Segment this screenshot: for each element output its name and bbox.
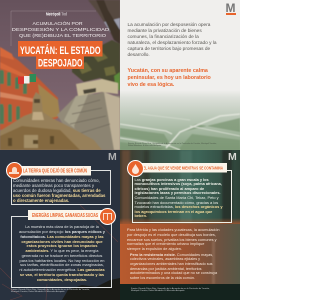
- icon: Mexican flag: [18, 74, 36, 84]
- text: tierra: acuerdos de dudosa legalidad, sus tierras de: [13, 188, 101, 193]
- text: agua: Tzucacab han documentado cómo, gracias a los: [134, 200, 218, 205]
- text: energías: organizaciones civiles han denunciado que: [21, 239, 103, 244]
- text: tierra: [13, 178, 106, 203]
- panel: cover with Yucatán landmarks: [0, 0, 120, 150]
- orange highlight text: peninsular, es hoy un laboratorio: [128, 74, 211, 80]
- text: agua: beben.: [134, 213, 147, 218]
- cover subtitle: QUE (RE)DIBUJA EL TERRITORIO: [19, 33, 107, 38]
- wind turbine background: [0, 205, 120, 300]
- source note: Fuente: Ricardo Pérez Ruiz, Geografía de la Acumulación en la Península de Yucatán,: [131, 288, 210, 290]
- text: Mérida: encarece sus suelos, privatiza los bienes comunes y: [127, 238, 217, 242]
- pyramid: [57, 94, 120, 150]
- text: energías: fotovoltaicos. Las comunidades mayas y las: [20, 234, 104, 239]
- text: Mérida: normaliza que el crecimiento urbano implique: [127, 242, 204, 246]
- intro text: naturaleza, el desplazamiento forzado y la: [128, 41, 216, 46]
- text: energías: sus tarifas, electrificación de zonas marginadas,: [20, 262, 104, 267]
- source note: [11, 288, 90, 293]
- text: agua: los agroquímicos terminan en el agua que: [134, 209, 212, 214]
- text: Mérida: siempre la expulsión de alguien.: [127, 247, 182, 251]
- cover photo collage: [0, 0, 120, 150]
- text box: tierra: [11, 170, 111, 205]
- text: agua: [134, 177, 223, 218]
- text: Mérida: Para Mérida y las ciudades yucatecas, la acumulación: [127, 228, 220, 232]
- text: Mérida: por despojo es el modelo que desdibuja sus bordes,: [127, 233, 216, 237]
- text: energías: ni autodeterminación energética. Las ganancias: [19, 267, 105, 272]
- intro text: captura de territorios bajo promesas de: [128, 47, 210, 52]
- orange highlight text: vivo de esa lógica.: [128, 82, 174, 88]
- panel: agua and Mérida: [120, 150, 240, 300]
- text: agua: Comunidades de Santa María Chi, Tekax, Peto y: [134, 195, 219, 200]
- text box: energías: [11, 216, 112, 288]
- heading: El agua que se vende mientras se contamina: [142, 163, 227, 172]
- tree: [88, 0, 120, 30]
- text: resistencia: colectivos vecinales, asambleas ejidales y: [130, 257, 200, 261]
- forest background: [120, 150, 240, 300]
- cover title: [18, 41, 102, 70]
- text: resistencia: autodeterminados y una ciudad que no se construya: [130, 271, 217, 275]
- logo: M: M: [226, 1, 236, 15]
- photo credit: Fuente: Ricardo Pérez Ruiz, Geografía de la Acumulación en la Península de Yucatán, Metrópoli Yucatán,: [128, 142, 217, 144]
- text: energías: para los habitantes locales. No hay reducción en: [20, 258, 104, 263]
- intro text: mediante la privatización de bienes: [128, 29, 202, 34]
- text: resistencia: organizaciones ambientales han intensificado sus: [130, 262, 213, 266]
- text: energías: generada no se traduce en beneficios directos: [22, 253, 102, 258]
- text: energías: se van, el territorio queda transformado y las: [20, 272, 104, 277]
- text: resistencia: Pero la resistencia existe. Comunidades mayas,: [130, 253, 213, 257]
- text: energías: La muestra más clara de la paradoja de la: [25, 224, 99, 229]
- text: energías: comunidades, despojadas.: [37, 277, 87, 282]
- cover subtitle: ACUMULACIÓN POR: [32, 21, 82, 26]
- source note: Metrópoli Yucatán, Rafael Mendoza. El Mercader Avispado: [11, 291, 64, 293]
- text: energías: [19, 224, 105, 282]
- text: energías: acumulación por despojo: los parques eólicos y: [19, 229, 105, 234]
- stone façade: [0, 92, 102, 150]
- text: agua: monocultivos intensivos (soya, palma africana,: [134, 181, 222, 186]
- orange highlight text: Yucatán, con su aparente calma: [128, 68, 208, 74]
- intro text: La acumulación por desposesión opera: [128, 22, 210, 28]
- photo credit: [128, 142, 217, 147]
- text: tierra: Comunidades enteras han denunciado cómo,: [13, 178, 100, 183]
- photo credit: Rafael Mendoza. El Mercader Avispado: [128, 145, 161, 147]
- text: resistencia: sobre los escombros de la vida común.: [130, 276, 195, 280]
- text: Mérida: [127, 228, 220, 251]
- text: resistencia: [130, 253, 218, 280]
- logo: M: M: [228, 151, 237, 163]
- text: agua: Las granjas porcinas a gran escala y los: [134, 177, 209, 182]
- cover subtitle: DESPOSESIÓN Y LA COMPLICIDAD: [12, 27, 109, 32]
- panel: tierra and energías: [0, 150, 120, 300]
- intro text: [128, 22, 216, 58]
- logo: M: M: [108, 151, 117, 163]
- cover subtitle: [12, 21, 109, 38]
- orange highlight text: [128, 68, 211, 88]
- cover title: DESPOJADO: [38, 58, 83, 70]
- panel: introduction: [120, 0, 240, 150]
- text: tierra: mediante asambleas poco transparentes y: [13, 183, 94, 188]
- heading: Energías limpias, ganancias sucias: [28, 210, 102, 220]
- source note: Metrópoli Yucatán, Rafael Mendoza. El Mercader Avispado: [131, 290, 184, 292]
- intro text: desarrollo.: [128, 53, 150, 58]
- text: agua: legislaciones laxas y permisos discrecionales.: [134, 190, 221, 195]
- text: tierra: uso común fueron fragmentadas, arrendadas: [13, 193, 105, 198]
- source note: Fuente: Ricardo Pérez Ruiz, Geografía de la Acumulación en la Península de Yucatán,: [11, 288, 90, 290]
- intro text: comunes, la financiarización de la: [128, 35, 199, 40]
- text: energías: estos proyectos ignoran los impactos: [27, 243, 97, 248]
- heading: La tierra que dejó de ser común: [21, 166, 91, 176]
- text: resistencia: demandas por justicia ambiental, territorios: [130, 267, 202, 271]
- text: agua: cítricos) han proliferado al amparo de: [134, 186, 204, 191]
- text: tierra: o directamente enajenadas.: [13, 198, 69, 203]
- colonial building: [0, 47, 58, 130]
- text: energías: ambientales. Y lo que es peor, la energía: [26, 248, 98, 253]
- logo: Metrópoli: Metrópoli Tod: [46, 12, 67, 16]
- source note: [131, 288, 210, 292]
- icon: land: [6, 162, 22, 179]
- text box: agua: [132, 170, 232, 223]
- text: agua: modelos extractivistas, los desechos orgánicos y: [134, 204, 223, 209]
- icon: water drop: [126, 160, 144, 177]
- aerial photo of monoculture: [120, 93, 240, 150]
- thin frame: [11, 11, 96, 46]
- icon: energy: [99, 208, 116, 225]
